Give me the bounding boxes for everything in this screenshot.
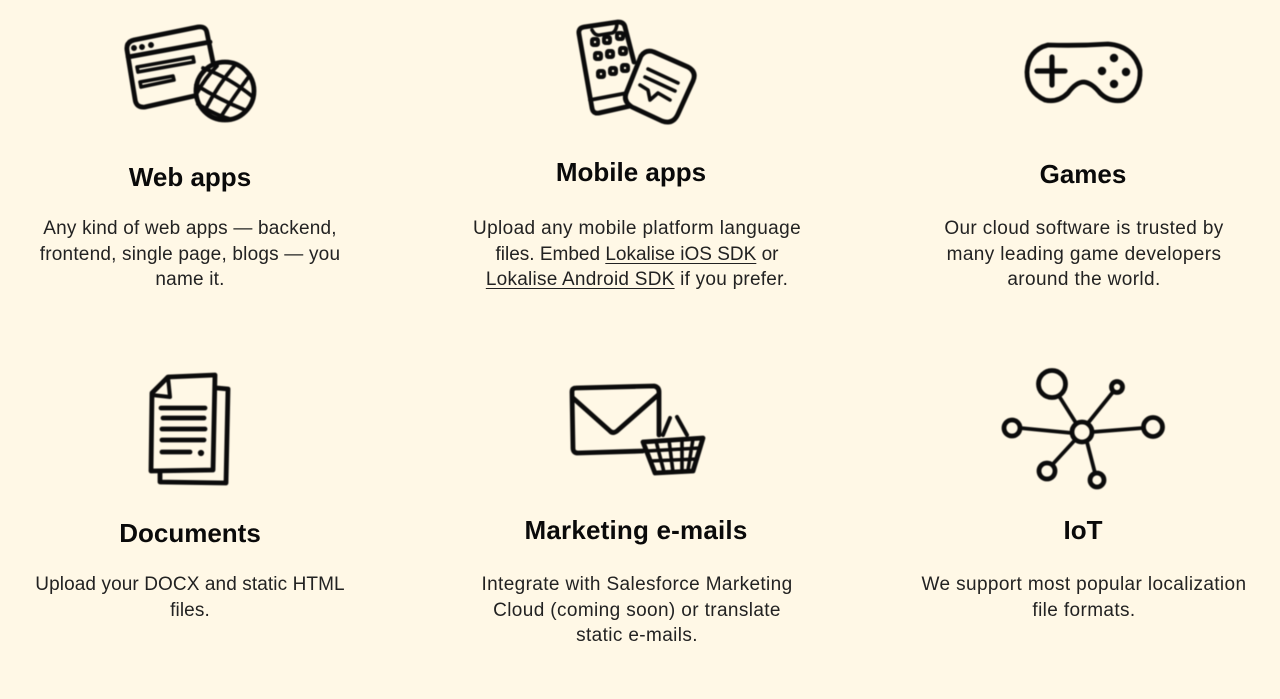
text: Marketing e-mails description	[481, 574, 793, 646]
icon: phone and chat card	[579, 22, 694, 122]
text: Documents description: files.	[170, 600, 210, 620]
text: Marketing e-mails description: Cloud (coming soon) or translate	[493, 600, 781, 620]
text: Mobile apps description	[473, 218, 801, 290]
icon: documents	[151, 375, 228, 483]
text: Web apps description: frontend, single page, blogs — you	[40, 244, 340, 264]
text: IoT description: file formats.	[1032, 600, 1136, 620]
text: Games description: many leading game developers	[947, 244, 1221, 264]
heading: Documents: Documents	[119, 518, 261, 548]
heading: Mobile apps: Mobile apps	[556, 157, 706, 187]
heading: Web apps: Web apps	[129, 162, 251, 192]
text: IoT description: We support most popular localization	[922, 574, 1246, 595]
text: Mobile apps description: Upload any mobile platform language	[473, 218, 801, 239]
text: Games description: Our cloud software is trusted by	[944, 218, 1224, 239]
heading: IoT: IoT	[1064, 515, 1102, 545]
text: Mobile apps description: files. Embed Lokalise iOS SDK or	[495, 244, 779, 264]
icon: envelope and basket	[572, 386, 703, 473]
heading: Games: Games	[1040, 159, 1126, 189]
icon: IoT network	[1004, 370, 1162, 487]
text: Games description: around the world.	[1007, 269, 1161, 290]
text: Games description	[944, 218, 1224, 290]
icon: web browser and globe	[127, 27, 254, 120]
icon: game controller	[1027, 44, 1140, 101]
text: Web apps description	[40, 218, 340, 290]
heading: Marketing e-mails: Marketing e-mails	[524, 515, 748, 545]
text: Mobile apps description: Lokalise Android SDK if you prefer.	[486, 269, 788, 290]
text: IoT description	[922, 574, 1246, 620]
text: Web apps description: Any kind of web apps — backend,	[43, 218, 337, 239]
text: Documents description: Upload your DOCX and static HTML	[35, 574, 345, 595]
text: Marketing e-mails description: static e-mails.	[576, 625, 698, 646]
text: Web apps description: name it.	[155, 269, 225, 290]
text: Documents description	[35, 574, 345, 620]
text: Marketing e-mails description: Integrate with Salesforce Marketing	[481, 574, 793, 595]
